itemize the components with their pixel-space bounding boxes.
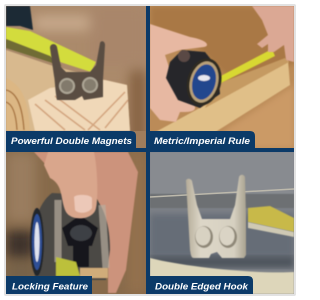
lower background xyxy=(132,131,146,146)
wood board xyxy=(156,60,290,131)
label: locking feature: Locking Feature xyxy=(12,282,88,292)
panel: double edged hook xyxy=(150,152,294,294)
label: double edged hook: Double Edged Hook xyxy=(155,282,249,292)
label: double edged hook xyxy=(150,276,253,294)
label: metric imperial rule xyxy=(150,131,255,148)
tape case xyxy=(6,6,33,30)
panel: powerful double magnets xyxy=(6,6,146,148)
tape measure body xyxy=(30,193,110,280)
icon: double edged hook xyxy=(186,175,246,258)
thumb xyxy=(44,152,97,218)
panel: metric imperial rule xyxy=(150,6,300,148)
yellow tape blade xyxy=(220,50,276,84)
thumbnail xyxy=(74,195,92,213)
yellow tape blade xyxy=(248,206,294,232)
tape measure body xyxy=(166,50,227,110)
yellow tape blade xyxy=(6,27,96,72)
cream floor xyxy=(150,258,294,294)
panel: locking feature xyxy=(6,152,146,294)
label: powerful double magnets xyxy=(6,131,136,148)
label: metric imperial rule: Metric/Imperial Rule xyxy=(154,136,250,146)
label: locking feature xyxy=(6,276,92,294)
label: powerful double magnets: Powerful Double Magnets xyxy=(11,136,132,146)
icon: magnetic hook xyxy=(50,41,105,100)
right hand xyxy=(252,6,294,62)
left hand xyxy=(150,24,207,122)
wood beam xyxy=(6,50,130,131)
hand xyxy=(34,152,138,293)
